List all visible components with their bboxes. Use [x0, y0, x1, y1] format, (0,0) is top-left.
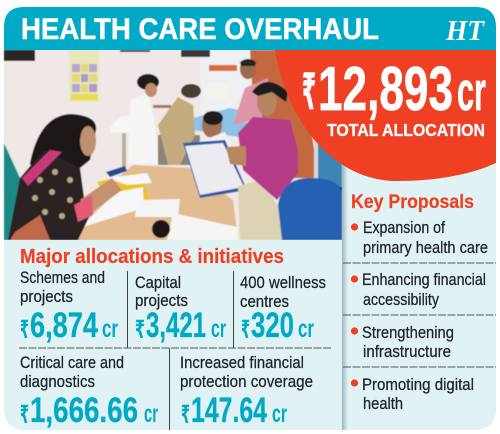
- header band: [4, 7, 496, 50]
- item: schemes and projects: [20, 268, 118, 345]
- total amount: ₹: [302, 64, 316, 120]
- item: increased financial protection coverage: protection coverage: [180, 372, 313, 391]
- item: capital projects: 3,421: [146, 306, 206, 345]
- item: capital projects: cr: [211, 315, 226, 343]
- item: critical care and diagnostics: [20, 353, 158, 430]
- list: key proposals: [343, 218, 496, 413]
- item: 400 wellness centres: 320: [251, 306, 294, 345]
- item: capital projects: [135, 273, 226, 345]
- item: critical care and diagnostics: Critical care and: [20, 353, 124, 372]
- proposal 1: [351, 218, 488, 257]
- proposal 3: infrastructure: [363, 342, 451, 361]
- proposal 3: [351, 323, 454, 361]
- logo: HT: HT: [445, 16, 486, 47]
- item: schemes and projects: Schemes and: [20, 268, 105, 287]
- item: 400 wellness centres: 400 wellness: [240, 273, 326, 292]
- proposal 2: [351, 270, 486, 309]
- item: increased financial protection coverage: [180, 353, 313, 430]
- item: 400 wellness centres: cr: [298, 315, 314, 343]
- item: schemes and projects: 6,874: [30, 306, 98, 345]
- proposal 4: health: [363, 394, 403, 413]
- item: capital projects: projects: [135, 291, 188, 310]
- item: increased financial protection coverage: ₹: [181, 401, 190, 429]
- item: schemes and projects: ₹: [20, 316, 29, 344]
- photo: clinic consultation: [4, 50, 342, 240]
- item: critical care and diagnostics: cr: [144, 400, 158, 428]
- proposal 4: [351, 375, 474, 413]
- heading: key proposals: Key Proposals: [351, 192, 474, 213]
- total allocation label: TOTAL ALLOCATION: [327, 120, 485, 140]
- item: critical care and diagnostics: 1,666.66: [30, 391, 138, 430]
- item: increased financial protection coverage: 147.64: [191, 391, 267, 430]
- item: critical care and diagnostics: ₹: [20, 401, 29, 429]
- proposal 3: Strengthening: [362, 323, 454, 342]
- item: critical care and diagnostics: diagnostics: [20, 372, 95, 391]
- item: 400 wellness centres: ₹: [241, 316, 250, 344]
- item: capital projects: ₹: [135, 316, 145, 344]
- red callout shape: [275, 50, 496, 181]
- item: increased financial protection coverage: Increased financial: [180, 353, 304, 372]
- callout: total allocation: [275, 50, 496, 181]
- heading: major allocations: Major allocations & initiatives: [20, 246, 284, 268]
- item: 400 wellness centres: centres: [240, 292, 289, 311]
- panel: key proposals background: [342, 160, 496, 430]
- proposal 1: Expansion of: [363, 218, 445, 237]
- panel: major allocations background: [4, 240, 342, 430]
- item: 400 wellness centres: [240, 273, 326, 345]
- item: capital projects: Capital: [135, 273, 181, 292]
- title: HEALTH CARE OVERHAUL: [21, 13, 379, 46]
- item: schemes and projects: cr: [102, 315, 118, 343]
- panel shadow edge: [342, 160, 348, 430]
- item: increased financial protection coverage: cr: [272, 400, 287, 428]
- proposal 2: accessibility: [363, 290, 439, 309]
- proposal 4: Promoting digital: [362, 375, 474, 394]
- item: schemes and projects: projects: [20, 287, 73, 306]
